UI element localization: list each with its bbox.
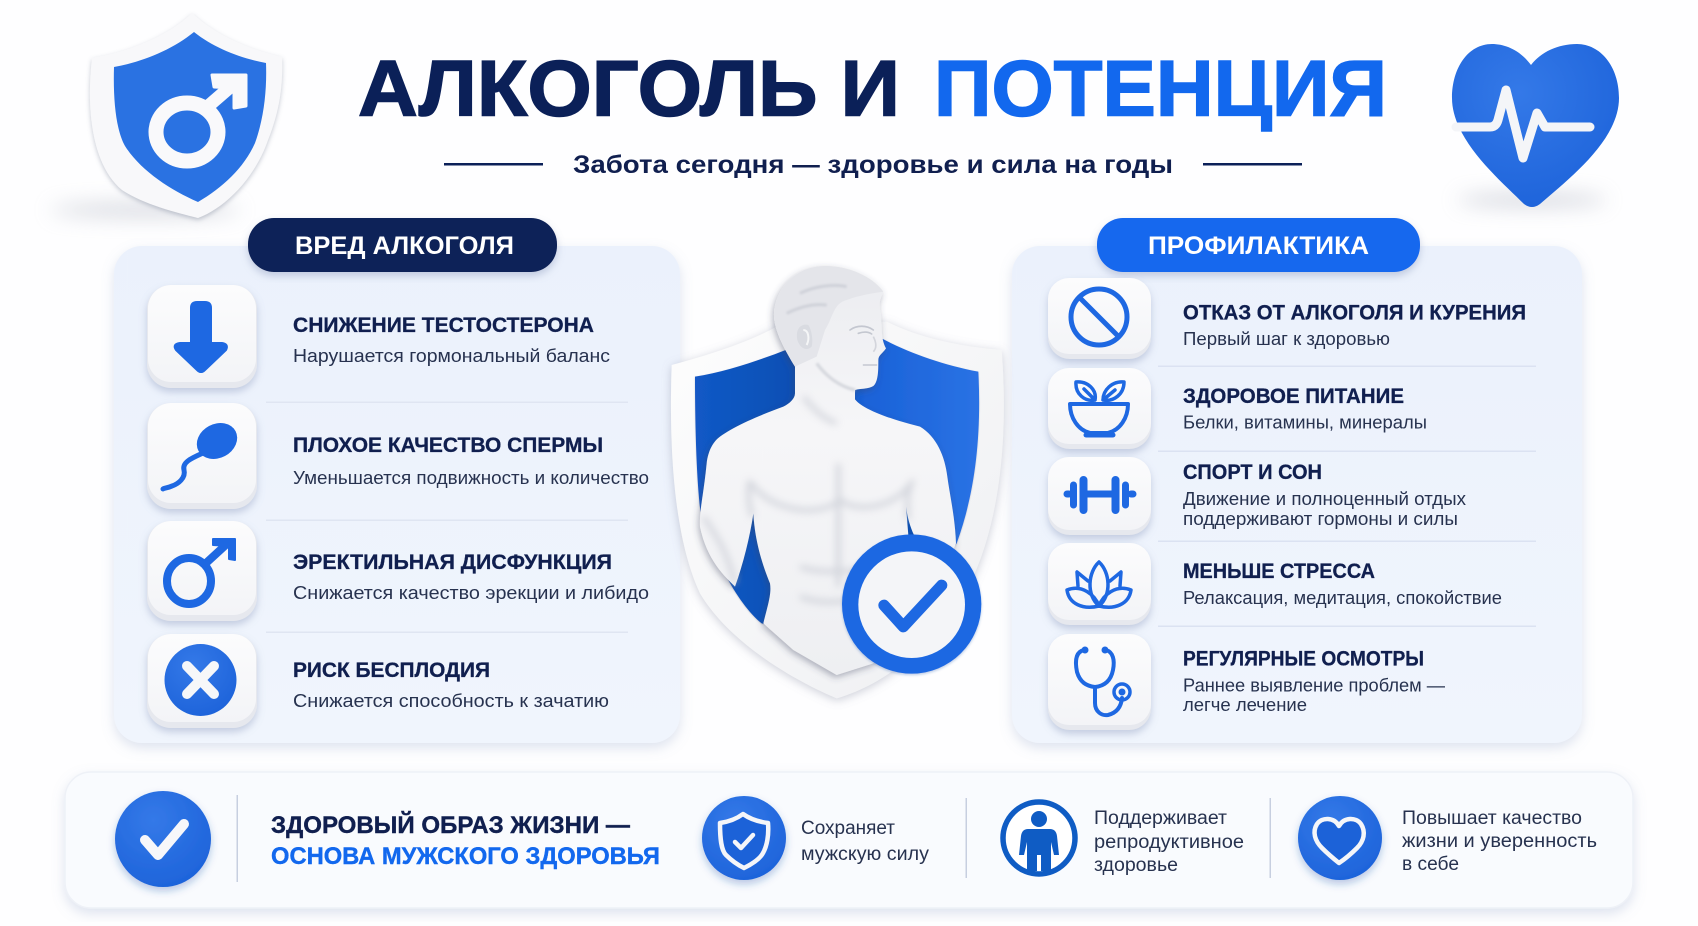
icon tile: bowl — [1048, 368, 1151, 449]
text: infertility — [293, 659, 609, 711]
badge: check — [842, 534, 981, 674]
icon tile: lotus — [1048, 543, 1151, 625]
text: quit alcohol: ОТКАЗ ОТ АЛКОГОЛЯ И КУРЕНИЯ — [1183, 302, 1526, 324]
title: ПОТЕНЦИЯ — [934, 44, 1387, 132]
text: checkups: легче лечение — [1183, 695, 1307, 715]
icon: male sign — [156, 75, 246, 161]
text: sperm quality: ПЛОХОЕ КАЧЕСТВО СПЕРМЫ — [293, 434, 603, 457]
heading pill: prevention: ПРОФИЛАКТИКА — [1148, 232, 1369, 260]
icon: check circle — [115, 791, 211, 887]
icon: person ring — [1003, 802, 1075, 874]
text: less stress — [1183, 560, 1502, 608]
text: infertility: РИСК БЕСПЛОДИЯ — [293, 659, 490, 682]
text: erectile dysfunction — [293, 551, 649, 603]
text: sport and sleep: поддерживают гормоны и силы — [1183, 509, 1458, 529]
text: quality of life: Повышает качество — [1402, 808, 1582, 829]
text: reproductive health: Поддерживает — [1094, 808, 1227, 829]
text: infertility: Снижается способность к зачатию — [293, 691, 609, 711]
text: less stress: Релаксация, медитация, спокойствие — [1183, 588, 1502, 608]
central figure: man on shield with check badge — [65, 266, 1633, 908]
panel: prevention — [1012, 218, 1582, 743]
text: sperm quality — [293, 434, 649, 488]
text: reproductive health — [1094, 808, 1244, 876]
text: sperm quality: Уменьшается подвижность и количество — [293, 468, 649, 488]
title: АЛКОГОЛЬ И — [358, 44, 900, 132]
heading pill: harm: ВРЕД АЛКОГОЛЯ — [295, 232, 514, 260]
text: quality of life — [1402, 808, 1597, 875]
text: quit alcohol — [1183, 302, 1526, 349]
text: quality of life: в себе — [1402, 854, 1459, 875]
text: testosterone — [293, 314, 610, 366]
text: preserves strength — [801, 818, 930, 865]
text: nutrition: ЗДОРОВОЕ ПИТАНИЕ — [1183, 385, 1404, 408]
heading pill: harm — [248, 218, 557, 272]
hair and face detail — [774, 266, 883, 390]
title — [358, 44, 1387, 132]
icon tile: stethoscope — [1048, 634, 1151, 730]
bottom bar — [65, 772, 1633, 908]
heading pill: prevention — [1097, 218, 1420, 272]
icon tile: dumbbell — [1048, 457, 1151, 535]
torso and head — [700, 266, 981, 675]
panel: harm of alcohol — [114, 218, 680, 743]
text: sport and sleep — [1183, 461, 1466, 529]
text: nutrition — [1183, 385, 1427, 432]
icon tile: male — [147, 521, 257, 621]
icon: heart circle — [1298, 796, 1382, 880]
text: checkups — [1183, 648, 1445, 715]
text: testosterone: Нарушается гормональный баланс — [293, 346, 610, 366]
text: reproductive health: здоровье — [1094, 855, 1178, 876]
icon: male symbol shield — [50, 13, 282, 218]
text: sport and sleep: СПОРТ И СОН — [1183, 461, 1322, 484]
text: erectile dysfunction: Снижается качество эрекции и либидо — [293, 583, 649, 603]
text: checkups: РЕГУЛЯРНЫЕ ОСМОТРЫ — [1183, 648, 1424, 670]
icon tile: sperm — [147, 403, 257, 509]
text: quit alcohol: Первый шаг к здоровью — [1183, 329, 1390, 349]
text: testosterone: СНИЖЕНИЕ ТЕСТОСТЕРОНА — [293, 314, 594, 337]
text: less stress: МЕНЬШЕ СТРЕССА — [1183, 560, 1375, 583]
text: healthy lifestyle: ЗДОРОВЫЙ ОБРАЗ ЖИЗНИ — — [271, 811, 630, 839]
subtitle: Забота сегодня — здоровье и сила на годы — [573, 151, 1173, 179]
icon tile: arrow down — [147, 285, 257, 388]
text: sport and sleep: Движение и полноценный отдых — [1183, 489, 1466, 509]
text: preserves strength: Сохраняет — [801, 818, 895, 839]
text: reproductive health: репродуктивное — [1094, 832, 1244, 853]
icon: heart with pulse — [1452, 44, 1619, 207]
shield — [671, 322, 1004, 698]
icon: shield circle — [702, 796, 786, 880]
icon tile: no sign — [1048, 278, 1151, 359]
text: healthy lifestyle — [271, 811, 660, 870]
text: erectile dysfunction: ЭРЕКТИЛЬНАЯ ДИСФУНКЦИЯ — [293, 551, 612, 574]
text: preserves strength: мужскую силу — [801, 844, 930, 865]
icon tile: cross — [147, 634, 257, 728]
text: nutrition: Белки, витамины, минералы — [1183, 412, 1427, 432]
text: quality of life: жизни и уверенность — [1402, 831, 1597, 852]
text: healthy lifestyle: ОСНОВА МУЖСКОГО ЗДОРОВЬЯ — [271, 843, 660, 870]
text: checkups: Раннее выявление проблем — — [1183, 676, 1445, 696]
